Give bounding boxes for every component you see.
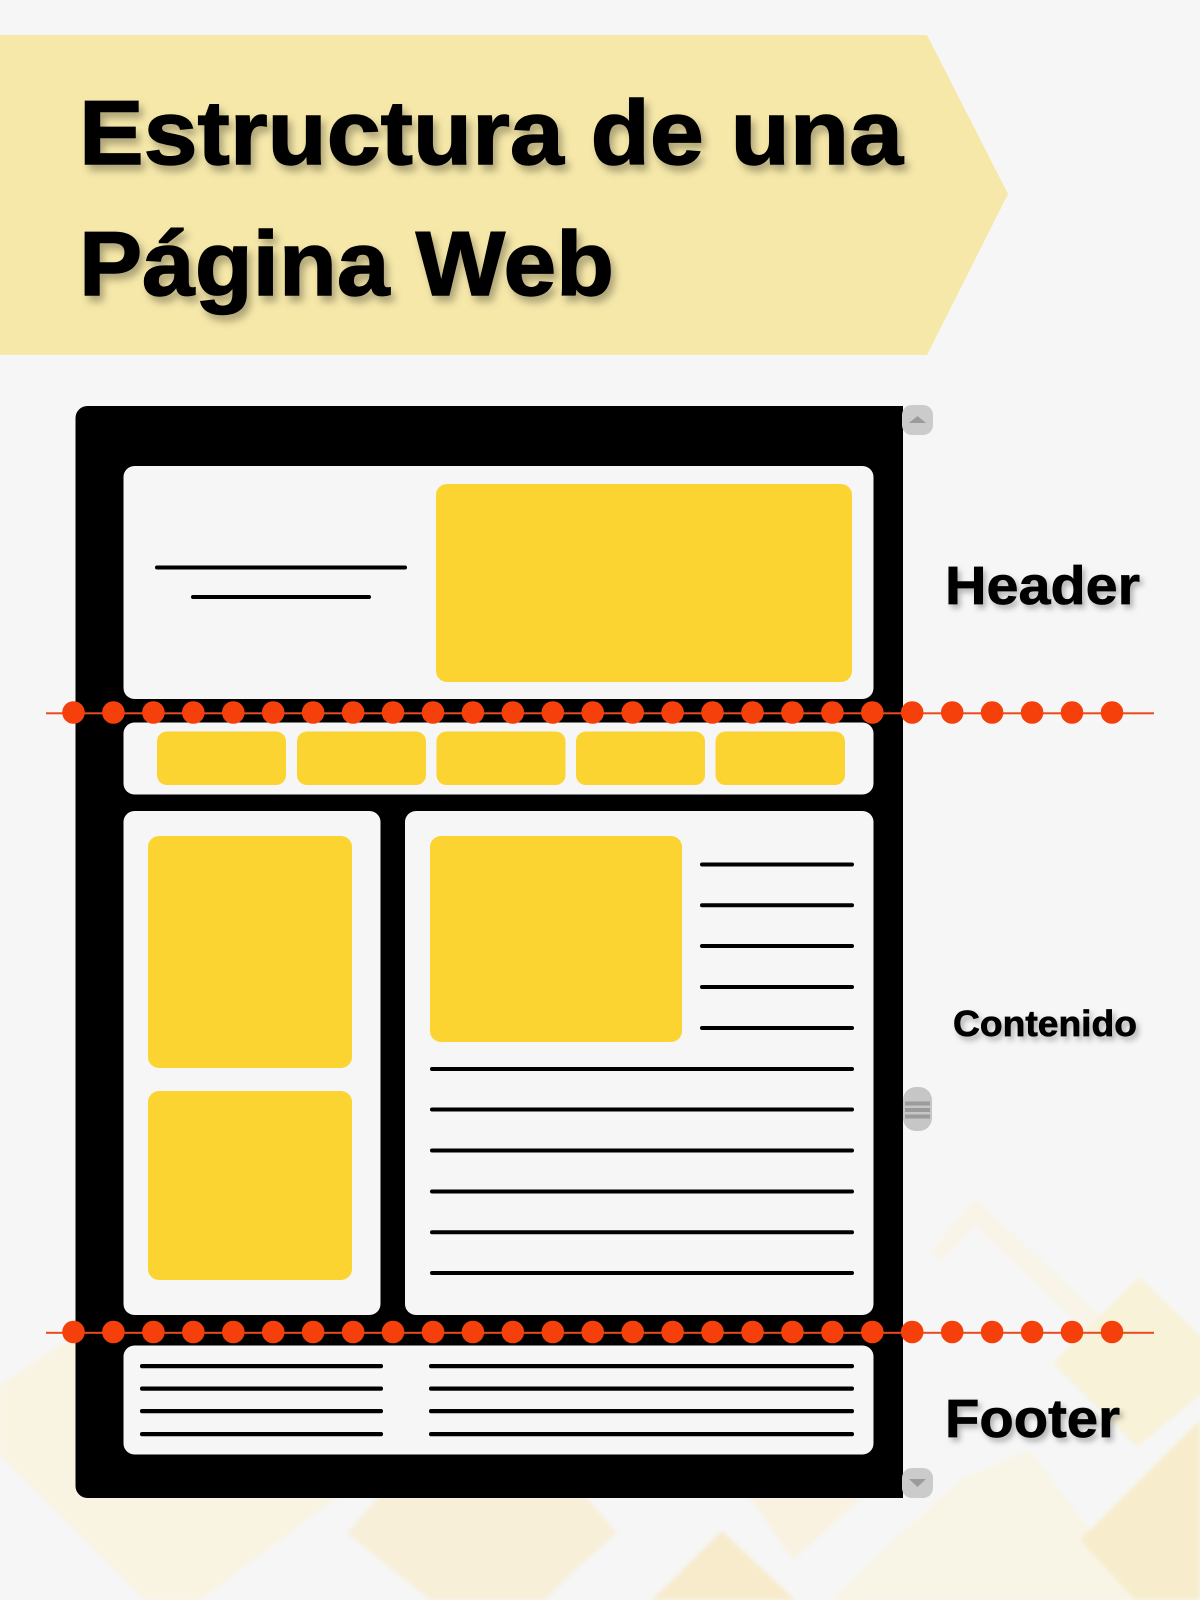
navigation buttons xyxy=(157,732,845,785)
title: Estructura de una xyxy=(79,83,904,184)
panel: main content xyxy=(405,811,874,1315)
dotted divider: header xyxy=(46,701,1154,724)
sidebar image one xyxy=(148,836,352,1068)
label: Footer: Footer xyxy=(945,1389,1120,1449)
long text lines xyxy=(430,1067,854,1275)
scrollbar up button xyxy=(902,405,933,435)
panel: sidebar xyxy=(124,811,380,1315)
scrollbar down button xyxy=(902,1468,933,1498)
label: Header: Header xyxy=(945,556,1140,616)
browser window frame xyxy=(76,406,903,1498)
label: Contenido: Contenido xyxy=(953,1003,1137,1044)
panel: footer xyxy=(124,1346,874,1454)
scrollbar thumb xyxy=(903,1087,932,1131)
title xyxy=(79,83,904,315)
content image xyxy=(430,836,682,1042)
background decorative diamonds xyxy=(0,1198,1200,1600)
title: Página Web xyxy=(79,214,614,315)
short text lines xyxy=(700,862,854,1030)
header image placeholder xyxy=(436,484,852,682)
panel: header xyxy=(124,466,874,699)
title banner xyxy=(0,35,1008,355)
panel: navigation xyxy=(124,722,874,794)
dotted divider: footer xyxy=(46,1321,1154,1343)
footer left lines xyxy=(140,1364,383,1436)
footer right lines xyxy=(429,1364,854,1436)
sidebar image two xyxy=(148,1091,352,1280)
header text lines xyxy=(155,566,407,599)
